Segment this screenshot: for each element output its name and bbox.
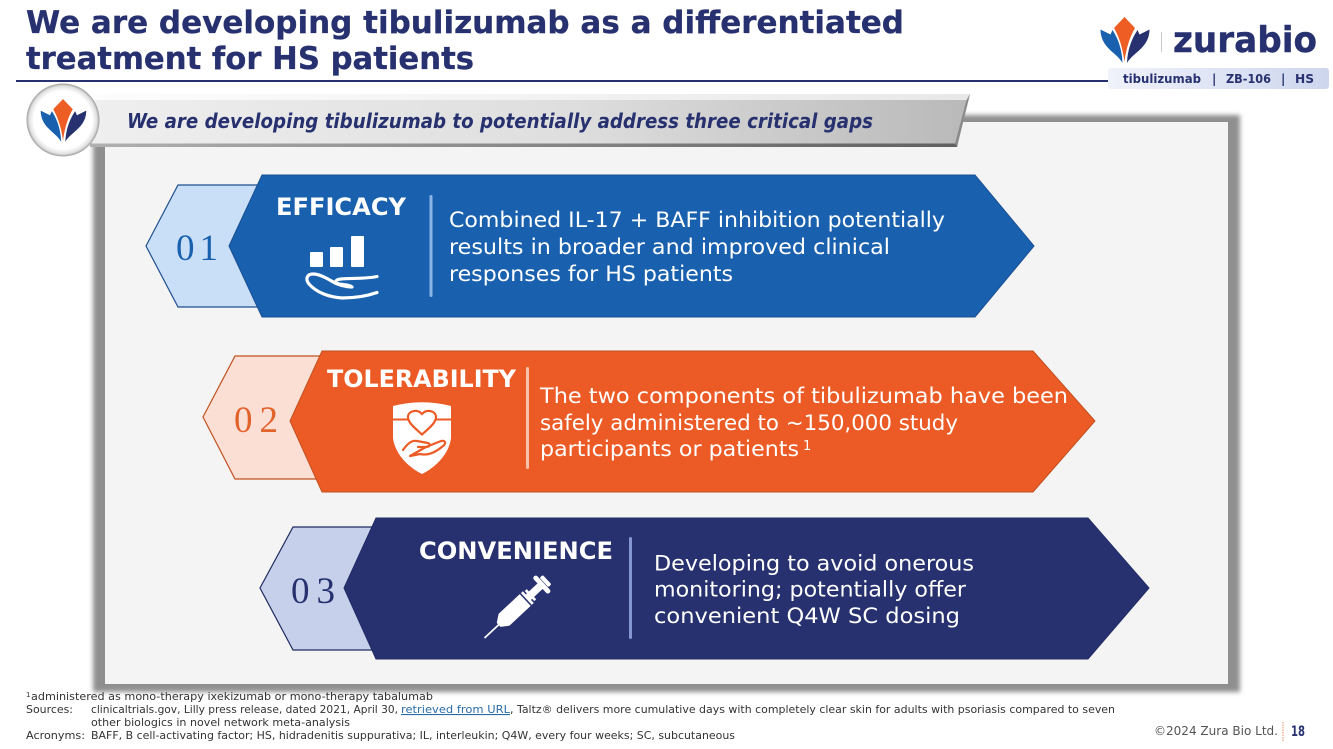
icon: syringe	[477, 571, 555, 646]
number tab 01	[146, 185, 290, 307]
tolerability text: The two components of tibulizumab have been	[539, 384, 1068, 408]
footnotes: BAFF, B cell-activating factor; HS, hidradenitis suppurativa; IL, interleukin; Q4W, every four weeks; SC, subcutaneous	[91, 729, 735, 742]
tolerability text	[539, 384, 1068, 461]
product tag	[1108, 68, 1329, 89]
tolerability arrow	[290, 351, 1095, 492]
convenience text: convenient Q4W SC dosing	[654, 604, 960, 628]
title: treatment for HS patients	[26, 41, 474, 77]
product tag: |	[1281, 72, 1285, 86]
banner	[90, 94, 970, 147]
icon: chart on hand	[307, 236, 377, 298]
footnotes: Sources:	[26, 703, 73, 716]
convenience arrow	[344, 518, 1149, 659]
page number: 18	[1291, 724, 1305, 740]
footnotes: administered as mono-therapy ixekizumab or mono-therapy tabalumab	[31, 690, 433, 703]
logo: zurabio	[1100, 17, 1317, 63]
footnotes: other biologics in novel network meta-analysis	[91, 716, 350, 729]
tolerability text: participants or patients	[540, 437, 799, 461]
convenience text: Developing to avoid onerous	[654, 552, 974, 576]
title	[26, 5, 904, 77]
number tab 03: 0 3	[291, 571, 335, 612]
panel: efficacy	[146, 175, 1034, 317]
footnotes: 1	[26, 691, 30, 699]
tolerability text: 1	[803, 439, 811, 454]
product tag: ZB-106	[1226, 72, 1271, 86]
icon: shield with heart and hand	[393, 402, 451, 474]
number tab 03	[260, 527, 400, 650]
banner logo badge	[26, 84, 100, 156]
footnotes: clinicaltrials.gov, Lilly press release, dated 2021, April 30,	[91, 703, 398, 716]
efficacy text	[449, 208, 945, 286]
panel: convenience	[260, 518, 1149, 659]
footnotes: retrieved from URL	[401, 703, 511, 716]
efficacy arrow	[229, 175, 1034, 317]
footnotes	[26, 690, 1115, 742]
panel: background	[93, 115, 1240, 692]
copyright: ©2024 Zura Bio Ltd.	[1154, 724, 1278, 738]
convenience text: monitoring; potentially offer	[654, 578, 966, 602]
logo: zurabio: zurabio	[1173, 20, 1317, 61]
banner: We are developing tibulizumab to potentially address three critical gaps	[127, 109, 873, 133]
efficacy text: responses for HS patients	[449, 262, 733, 286]
product tag: |	[1212, 72, 1216, 86]
footnotes: Acronyms:	[26, 729, 85, 742]
number tab 01: 0 1	[176, 228, 218, 269]
panel: tolerability	[203, 351, 1095, 492]
number tab 02	[203, 356, 340, 479]
product tag: HS	[1295, 72, 1314, 86]
convenience text	[654, 552, 974, 628]
product tag: tibulizumab	[1123, 72, 1201, 86]
efficacy heading: EFFICACY	[276, 193, 407, 221]
tolerability heading: TOLERABILITY	[327, 365, 517, 393]
convenience heading: CONVENIENCE	[419, 537, 613, 565]
efficacy text: results in broader and improved clinical	[449, 235, 890, 259]
efficacy text: Combined IL-17 + BAFF inhibition potentially	[449, 208, 945, 232]
number tab 02: 0 2	[234, 400, 278, 441]
title: We are developing tibulizumab as a differentiated	[26, 5, 904, 41]
footnotes: , Taltz® delivers more cumulative days with completely clear skin for adults with psoriasis compared to seven	[510, 703, 1115, 716]
tolerability text: safely administered to ~150,000 study	[540, 411, 958, 435]
